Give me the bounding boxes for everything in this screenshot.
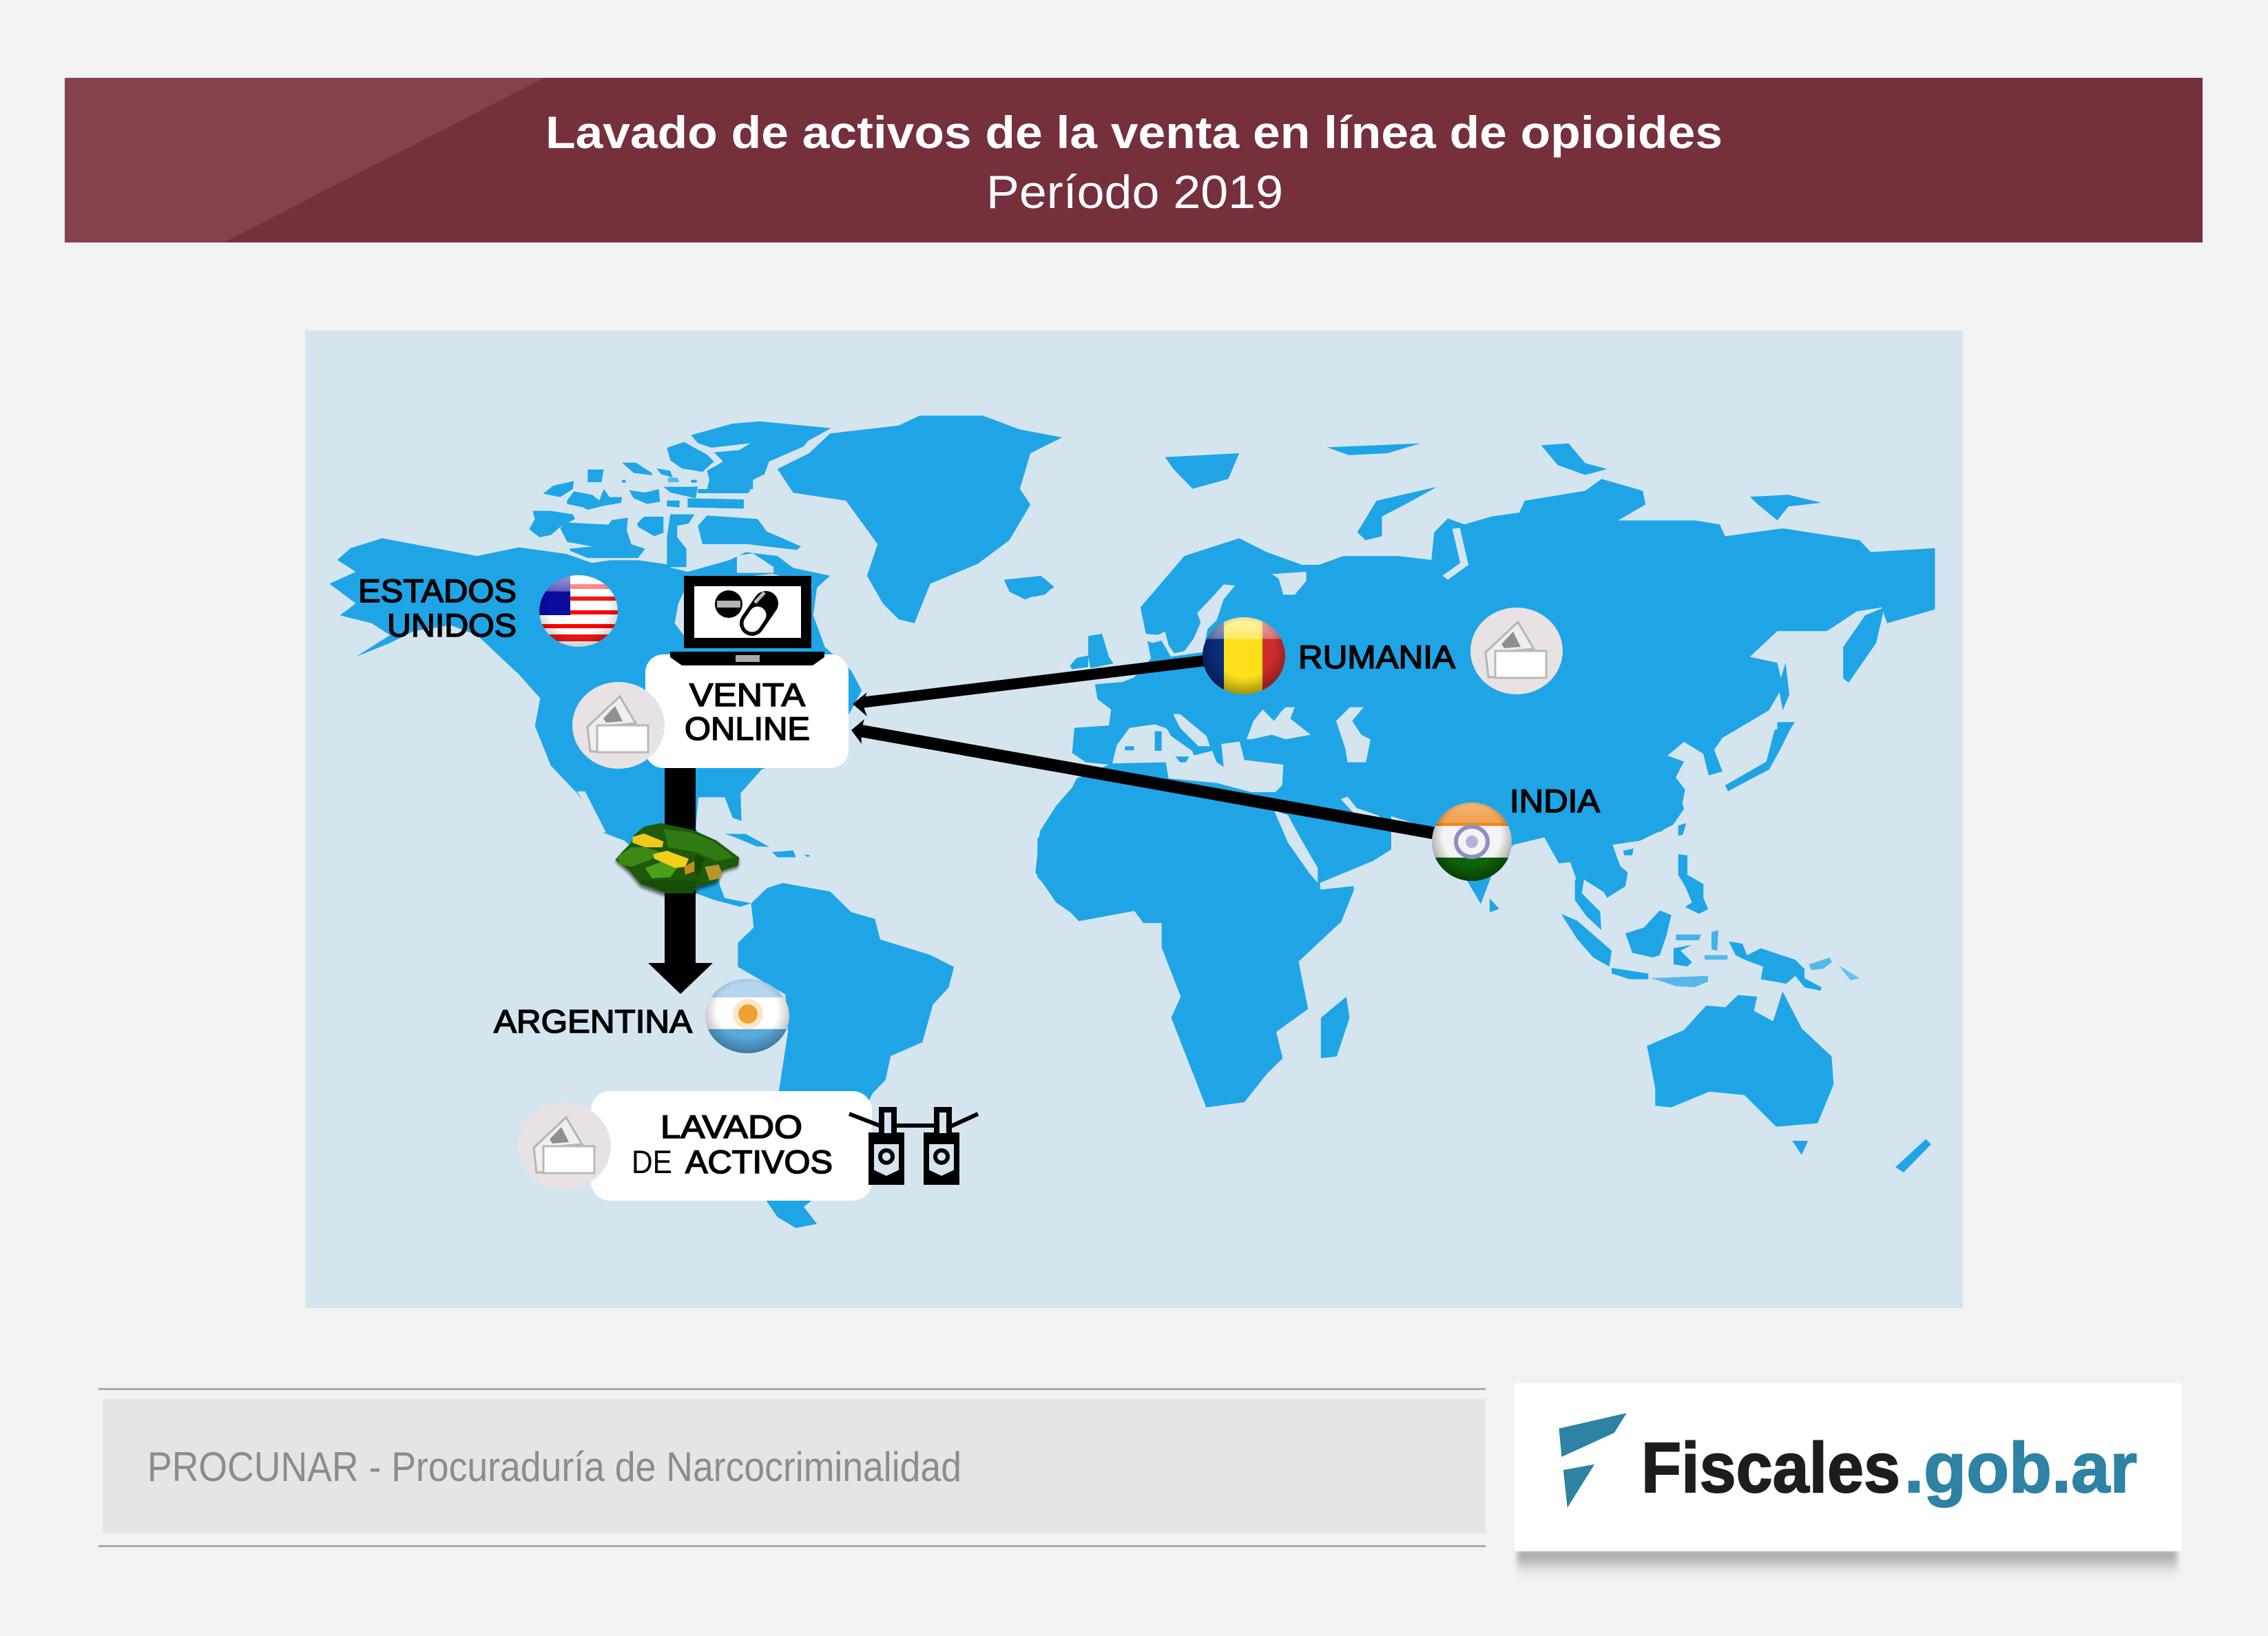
panel: lavado de activos: DE [632, 1143, 672, 1180]
arrow: India to venta online [851, 719, 1436, 833]
logo wordmark: .gob.ar [1904, 1428, 2137, 1507]
laptop base [670, 652, 824, 665]
Africa, Madagascar and Australia [1037, 793, 1931, 1172]
flag: India [1431, 802, 1512, 882]
footer source bar [98, 1388, 1486, 1547]
South America and Caribbean [725, 834, 954, 1228]
world map [329, 415, 1935, 1228]
panel: lavado de activos: LAVADO [660, 1108, 802, 1145]
flag: Estados Unidos [539, 575, 618, 647]
label: Estados Unidos: UNIDOS [387, 607, 517, 643]
Canadian Arctic islands [529, 422, 831, 573]
panel: lavado de activos: ACTIVOS [685, 1143, 833, 1180]
header banner [65, 78, 2203, 242]
icon: bills on clothesline [849, 1110, 978, 1182]
title: Lavado de activos de la venta en línea de opioides [545, 107, 1723, 158]
North America and Greenland [329, 415, 1062, 907]
logo card [1515, 1383, 2181, 1580]
icon: envelope lavado [519, 1103, 611, 1190]
logo wordmark: Fiscales [1641, 1428, 1900, 1507]
panel: lavado de activos [591, 1091, 872, 1201]
label: Argentina: ARGENTINA [494, 1003, 693, 1039]
icon: money bundle [615, 823, 739, 897]
icon: envelope Rumania [1470, 608, 1563, 694]
label: Estados Unidos [358, 572, 517, 643]
label: Estados Unidos: ESTADOS [358, 572, 517, 609]
panel: venta online [645, 652, 849, 768]
flag: Rumania [1203, 617, 1286, 694]
Eurasia [1141, 444, 1935, 904]
subtitle: Período 2019 [986, 166, 1283, 218]
laptop icon [684, 576, 811, 648]
source text: PROCUNAR - Procuraduría de Narcocriminalidad [147, 1444, 961, 1490]
label: India: INDIA [1510, 783, 1601, 819]
Europe and Middle East [1033, 565, 1391, 923]
panel: venta online: ONLINE [685, 710, 810, 747]
panel: venta online: VENTA [689, 676, 806, 713]
label: Rumania: RUMANIA [1298, 639, 1456, 675]
Southeast Asia and Oceania [1501, 772, 1860, 991]
logo wordmark [1641, 1428, 2137, 1507]
map panel [305, 331, 1963, 1308]
flag: Argentina [705, 978, 789, 1054]
arrow: Rumania to venta online [853, 661, 1205, 716]
icon: envelope Estados Unidos [572, 682, 665, 769]
arrow: venta online to Argentina [648, 765, 713, 994]
logo mark [1559, 1413, 1627, 1508]
